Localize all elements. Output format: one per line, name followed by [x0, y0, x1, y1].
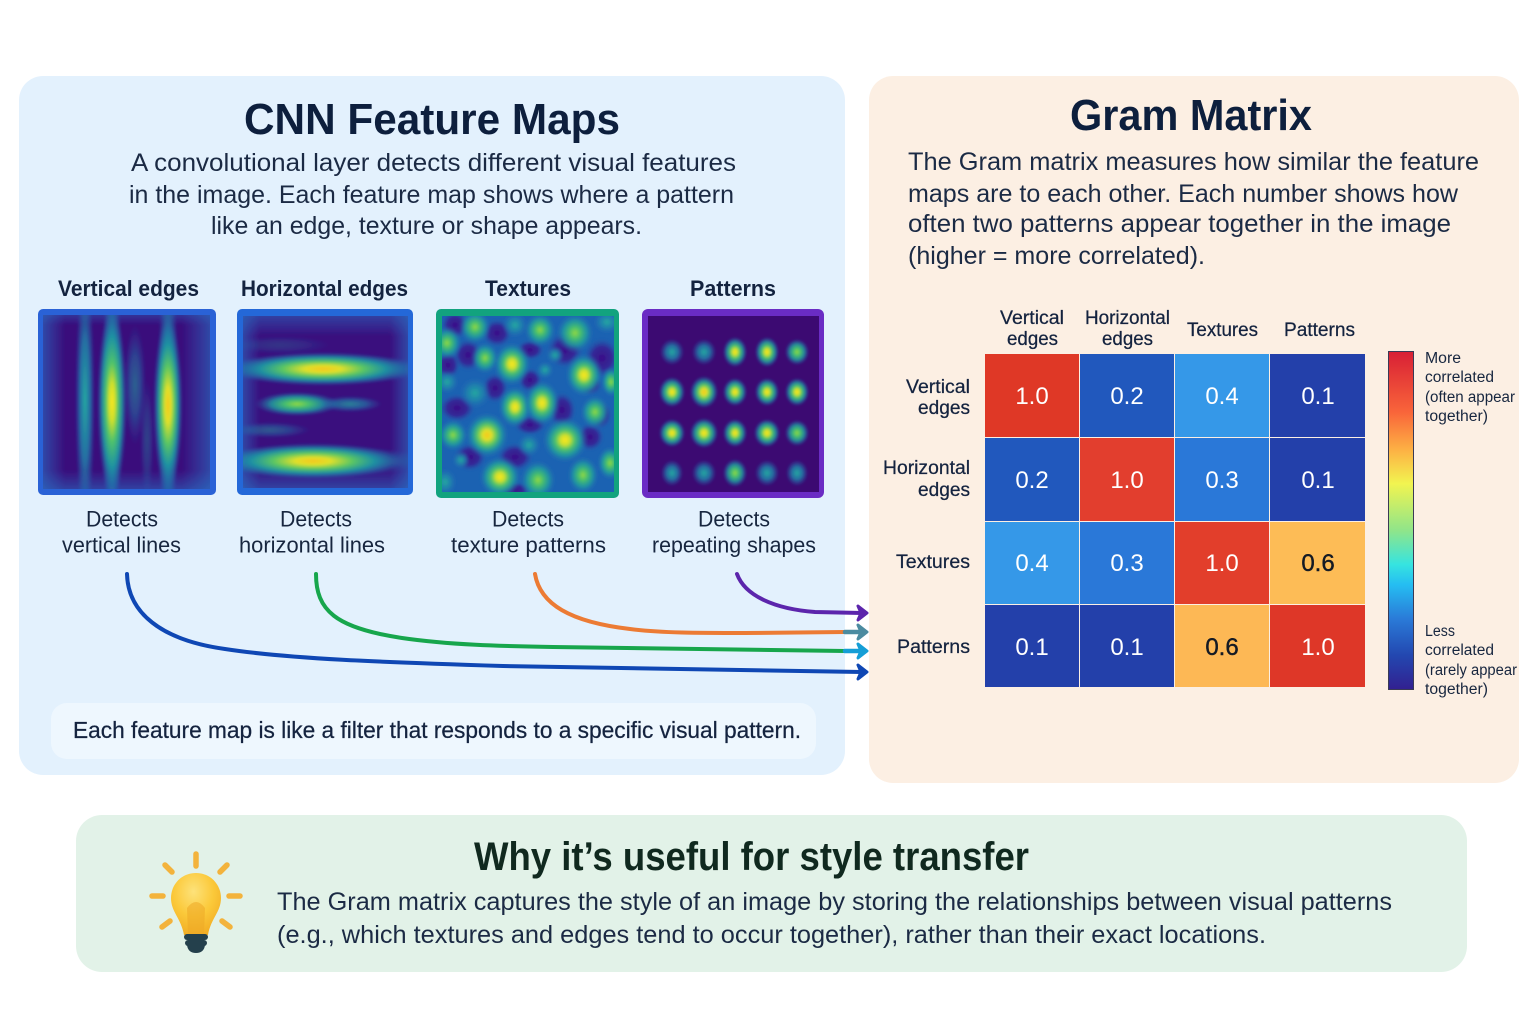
heatmap matrix: 0.1 [1301, 467, 1335, 494]
heatmap matrix: 0.4 [1205, 383, 1239, 410]
caption: vertical lines: vertical lines [62, 532, 181, 558]
row labels: Patterns [897, 637, 970, 658]
heading: Textures: Textures [485, 276, 571, 301]
heading: Vertical edges: Vertical edges [58, 276, 199, 301]
row labels: edges [918, 398, 970, 419]
colour scale legend [1388, 350, 1517, 698]
heatmap matrix: 0.2 [1015, 467, 1049, 494]
text block: CNN description: in the image. Each feature map shows where a pattern [129, 181, 734, 209]
caption: texture patterns: texture patterns [451, 532, 606, 558]
text block: Gram description [908, 148, 1479, 270]
caption: texture patterns [451, 506, 606, 558]
heatmap: horizontal edges [237, 309, 413, 495]
caption: horizontal lines: horizontal lines [239, 532, 385, 558]
heatmap: vertical edges [38, 309, 216, 495]
row labels: Vertical [906, 377, 970, 398]
caption: texture patterns: Detects [492, 506, 564, 532]
colour scale legend: together) [1425, 408, 1488, 425]
colour scale legend: Less [1425, 623, 1455, 640]
heatmap matrix: 0.4 [1015, 550, 1049, 577]
heatmap matrix: 0.1 [1015, 634, 1049, 661]
column labels: Horizontal [1085, 308, 1170, 329]
callout: filter note [51, 703, 816, 759]
text block: Gram description: The Gram matrix measures how similar the feature [908, 148, 1479, 176]
text block: why useful description [277, 888, 1392, 949]
heading: Patterns: Patterns [690, 276, 776, 301]
text block: Gram description: maps are to each other. Each number shows how [908, 180, 1459, 208]
arrow: horizontal edges to patterns row [316, 574, 867, 658]
arrow: vertical edges to patterns row [127, 574, 867, 679]
heatmap matrix: 1.0 [1301, 634, 1335, 661]
heatmap matrix: 0.3 [1110, 550, 1144, 577]
text block: Gram description: (higher = more correlated). [908, 242, 1205, 270]
caption: repeating shapes [652, 506, 816, 558]
panel: CNN feature maps [19, 76, 845, 775]
heatmap matrix: 0.1 [1110, 634, 1144, 661]
text block: CNN description: like an edge, texture or shape appears. [211, 212, 642, 240]
panel: Gram matrix [869, 76, 1519, 783]
heatmap matrix: 1.0 [1015, 383, 1049, 410]
column labels: Patterns [1284, 320, 1355, 341]
colour scale legend: (often appear [1425, 389, 1515, 406]
colour scale legend: correlated [1425, 642, 1494, 659]
row labels: Textures [896, 552, 970, 573]
text block: CNN description: A convolutional layer detects different visual features [131, 149, 736, 177]
colour scale legend: (rarely appear [1425, 662, 1517, 679]
text block: CNN description [129, 149, 736, 240]
heading: Horizontal edges: Horizontal edges [241, 276, 408, 301]
text block: why useful description: The Gram matrix captures the style of an image by storing the relationships between visual patterns [277, 888, 1392, 916]
colour scale legend: together) [1425, 681, 1488, 698]
panel: why it's useful [76, 815, 1467, 972]
colour scale legend: More [1425, 350, 1461, 367]
icon: light bulb [152, 854, 240, 953]
column labels: edges [1102, 329, 1153, 350]
colour scale legend: correlated [1425, 369, 1494, 386]
heatmap matrix [985, 354, 1365, 687]
caption: horizontal lines: Detects [280, 506, 352, 532]
caption: vertical lines [62, 506, 181, 558]
text block: Gram description: often two patterns appear together in the image [908, 210, 1451, 238]
caption: horizontal lines [239, 506, 385, 558]
text block: why useful description: (e.g., which textures and edges tend to occur together), rather than their exact locations. [277, 921, 1266, 949]
heatmap matrix: 0.6 [1205, 634, 1239, 661]
heatmap matrix: 1.0 [1205, 550, 1239, 577]
title: CNN Feature Maps: CNN Feature Maps [244, 95, 620, 144]
column labels: Vertical [1000, 308, 1064, 329]
caption: vertical lines: Detects [86, 506, 158, 532]
heatmap matrix: 1.0 [1110, 467, 1144, 494]
callout: filter note: Each feature map is like a filter that responds to a specific visual pattern. [73, 717, 801, 743]
arrow: patterns to patterns row [737, 574, 867, 620]
caption: repeating shapes: Detects [698, 506, 770, 532]
arrow: textures to patterns row [535, 574, 867, 639]
heatmap matrix: 0.6 [1301, 550, 1335, 577]
row labels [883, 377, 970, 658]
caption: repeating shapes: repeating shapes [652, 532, 816, 558]
row labels: edges [918, 480, 970, 501]
title: Gram Matrix: Gram Matrix [1070, 91, 1312, 140]
heatmap matrix: 0.1 [1301, 383, 1335, 410]
heading: why useful: Why it’s useful for style transfer [474, 835, 1029, 879]
heatmap matrix: 0.3 [1205, 467, 1239, 494]
heatmap: textures [432, 309, 623, 500]
heatmap: patterns [642, 309, 824, 498]
column labels [1000, 308, 1355, 350]
row labels: Horizontal [883, 458, 970, 479]
column labels: edges [1007, 329, 1058, 350]
column labels: Textures [1187, 320, 1258, 341]
heatmap matrix: 0.2 [1110, 383, 1144, 410]
